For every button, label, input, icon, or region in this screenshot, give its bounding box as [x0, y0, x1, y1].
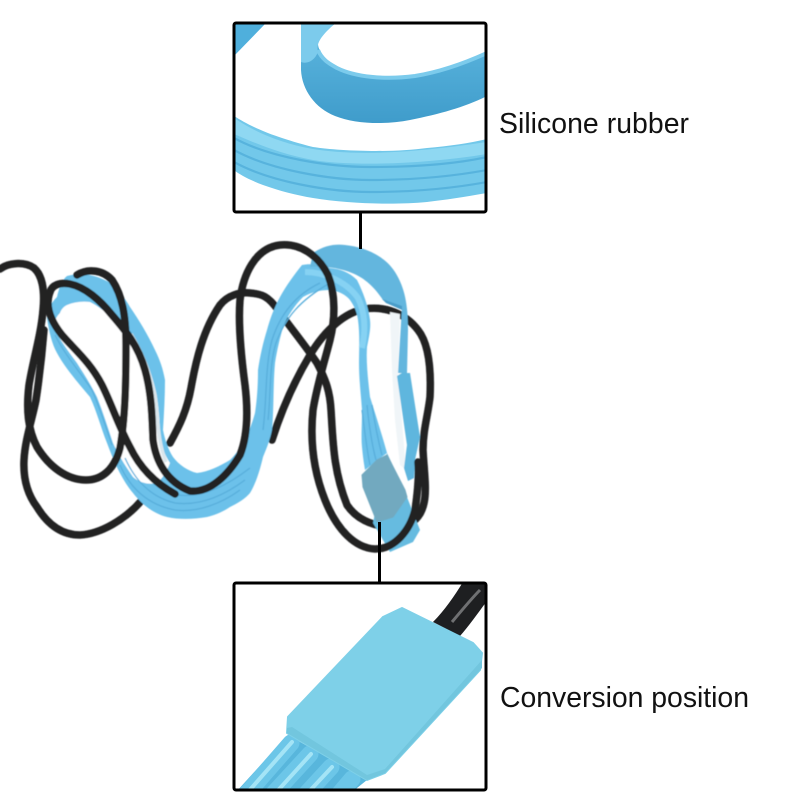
panel: conversion position close-up — [234, 582, 490, 800]
band: main grooved strip — [47, 264, 387, 519]
close-up: black cable — [433, 584, 484, 636]
label: silicone rubber: Silicone rubber — [499, 108, 689, 140]
connector line: bottom callout — [378, 522, 381, 583]
close-up: ribbed fingers — [239, 735, 366, 788]
panel: silicone rubber close-up — [234, 22, 487, 212]
close-up: grooved band — [234, 116, 487, 204]
band: open centre of the loop — [53, 302, 170, 484]
label: conversion position: Conversion position — [500, 682, 749, 714]
close-up: connector bevel — [287, 660, 482, 780]
close-up: curled band — [301, 22, 487, 123]
band: connector face — [362, 455, 407, 522]
band: heat shrink sleeve — [397, 373, 420, 481]
band: top strap — [310, 245, 408, 373]
band: pale film edge — [131, 334, 166, 462]
band: light strand highlight — [305, 272, 364, 348]
band: connector base — [373, 453, 420, 552]
cable: rear strands behind band — [24, 293, 430, 535]
connector line: top callout — [359, 212, 362, 249]
cable: front strands over band — [0, 245, 418, 549]
band: groove lines — [55, 283, 382, 511]
panel frame — [234, 23, 486, 212]
panel frame — [234, 583, 486, 790]
band: top strap shading — [382, 299, 402, 310]
product: heating cable with silicone band — [0, 245, 430, 552]
band: translucent back film — [390, 312, 406, 470]
close-up: band corner — [236, 24, 264, 54]
close-up: connector body — [287, 608, 482, 780]
